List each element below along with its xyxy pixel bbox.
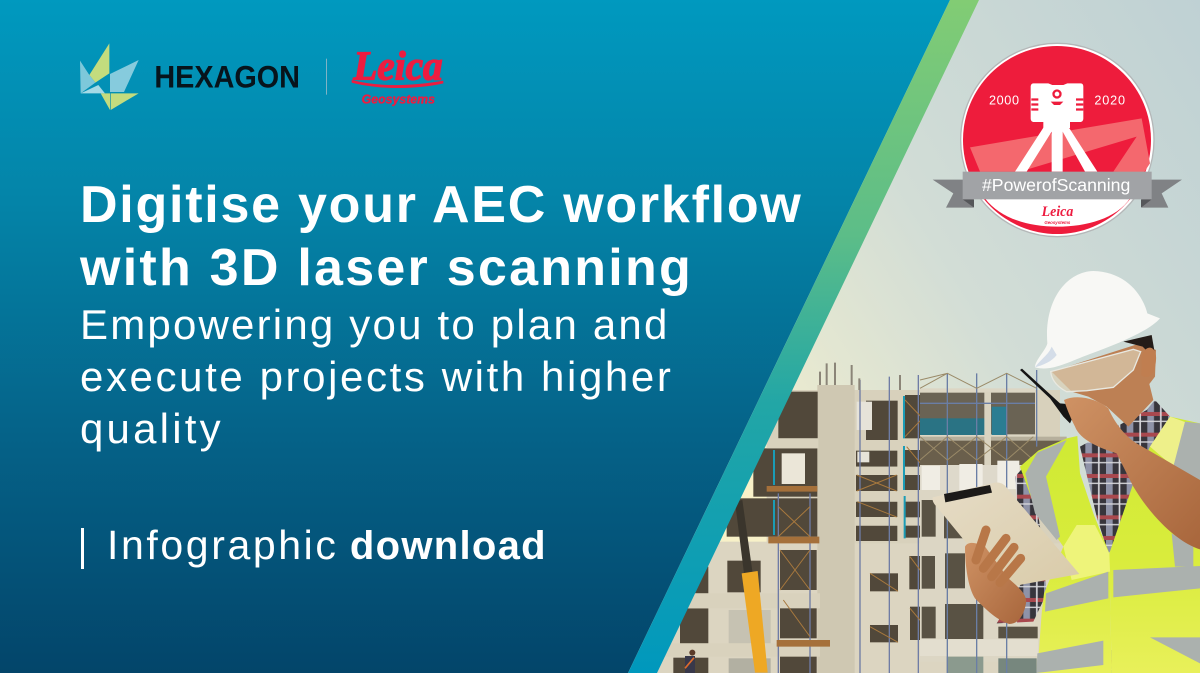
ribbon: [933, 180, 973, 208]
concrete core: [817, 385, 855, 673]
tripod: [1015, 127, 1097, 172]
vest: [1020, 436, 1112, 673]
diagonal gradient strip: [628, 0, 979, 673]
building under construction: [653, 363, 1067, 673]
Leica wordmark: Leica: [352, 43, 443, 89]
subheading: Empowering you to plan and: [80, 301, 670, 348]
subheading: quality: [80, 405, 224, 452]
subheading: execute projects with higher: [80, 353, 673, 400]
anniversary badge: 2020: [1094, 93, 1125, 107]
headline: with 3D laser scanning: [80, 239, 693, 297]
scanner icon: [1031, 83, 1083, 128]
crane arm: [735, 500, 768, 673]
vest reflective stripes: [1025, 422, 1200, 673]
worker: [685, 650, 695, 673]
logo: Hexagon and Leica Geosystems: [80, 43, 443, 110]
hard hat: [1035, 271, 1160, 368]
small Leica mark: Leica: [1041, 204, 1073, 220]
headline: [80, 176, 803, 297]
light wedge: [970, 118, 1150, 173]
engineer figure: [932, 271, 1200, 673]
infographic download label: Infographic download: [107, 522, 547, 568]
neck and face: [1052, 343, 1156, 427]
year labels: 2000: [989, 93, 1019, 107]
shirt: [997, 400, 1170, 623]
small Leica mark: Geosystems: [1044, 220, 1071, 225]
safety goggles: [1051, 349, 1141, 392]
Hexagon wordmark: HEXAGON: [154, 59, 300, 94]
divider bar: [81, 528, 84, 569]
sky background: [620, 0, 1200, 673]
arm and hand: [1064, 397, 1200, 549]
white lower segment: [985, 198, 1130, 227]
subheading: [80, 301, 673, 452]
hand holding tablet: [965, 530, 1026, 624]
Hexagon mark: [80, 43, 139, 110]
tablet: [932, 482, 1079, 587]
Leica wordmark: Geosystems: [362, 92, 435, 106]
anniversary badge: [933, 43, 1182, 237]
Leica wordmark: [352, 43, 443, 106]
radio: [1020, 369, 1078, 423]
blue panel: [0, 0, 950, 673]
anniversary badge: #PowerofScanning: [982, 175, 1130, 195]
headline: Digitise your AEC workflow: [80, 176, 803, 234]
